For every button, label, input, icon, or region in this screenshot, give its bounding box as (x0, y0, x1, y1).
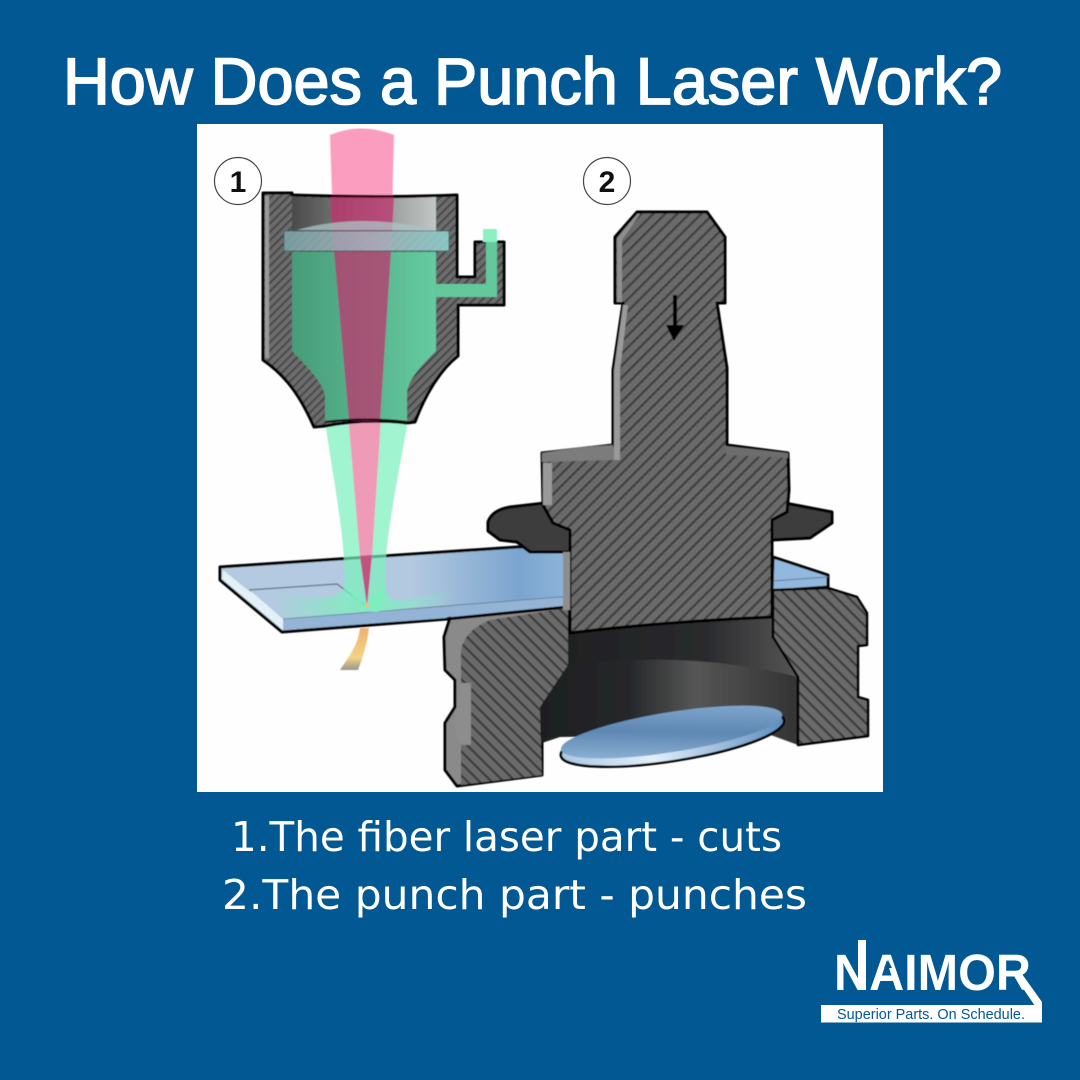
laser beam inside nozzle (330, 197, 394, 421)
callout: number 1 (214, 158, 262, 204)
logo: Naimor (821, 940, 1042, 1023)
die left side wall (444, 607, 568, 786)
text: step 1: 1.The fiber laser part - cuts (231, 813, 782, 861)
beam overlap on plate (360, 555, 372, 606)
pink laser beam (330, 128, 394, 606)
arrow: punch direction (666, 295, 684, 341)
cut disc (557, 695, 788, 778)
callout: number 2: 2 (599, 166, 615, 199)
callout: number 2 (584, 158, 630, 204)
gas on plate left (275, 583, 365, 619)
gas on plate right (370, 583, 455, 612)
cut sparks (340, 628, 369, 670)
nozzle exit line (325, 420, 407, 422)
panel: punch laser diagram (197, 124, 883, 792)
green gas jet (325, 421, 408, 612)
lens (284, 221, 449, 251)
nozzle body (263, 193, 504, 427)
logo: Naimor: NAIMOR (834, 944, 1031, 1001)
stripper ring right (772, 503, 832, 540)
stripper ring left (488, 503, 570, 552)
cavity (540, 617, 798, 745)
text: step 2: 2.The punch part - punches (222, 871, 807, 919)
callout: number 1: 1 (230, 166, 246, 199)
logo: Naimor: Superior Parts. On Schedule. (837, 1007, 1025, 1023)
gas side channel (434, 242, 497, 297)
nozzle interior gas (292, 252, 436, 421)
punch body (542, 212, 789, 633)
die right hatched section (773, 588, 868, 745)
sheet metal plate (220, 545, 828, 632)
title: How Does a Punch Laser Work? (63, 44, 1002, 118)
gas inlet (483, 229, 497, 242)
nozzle chamber (292, 197, 436, 232)
spark point (365, 603, 369, 607)
die left groove (454, 683, 471, 745)
die left hatched section (461, 608, 568, 785)
